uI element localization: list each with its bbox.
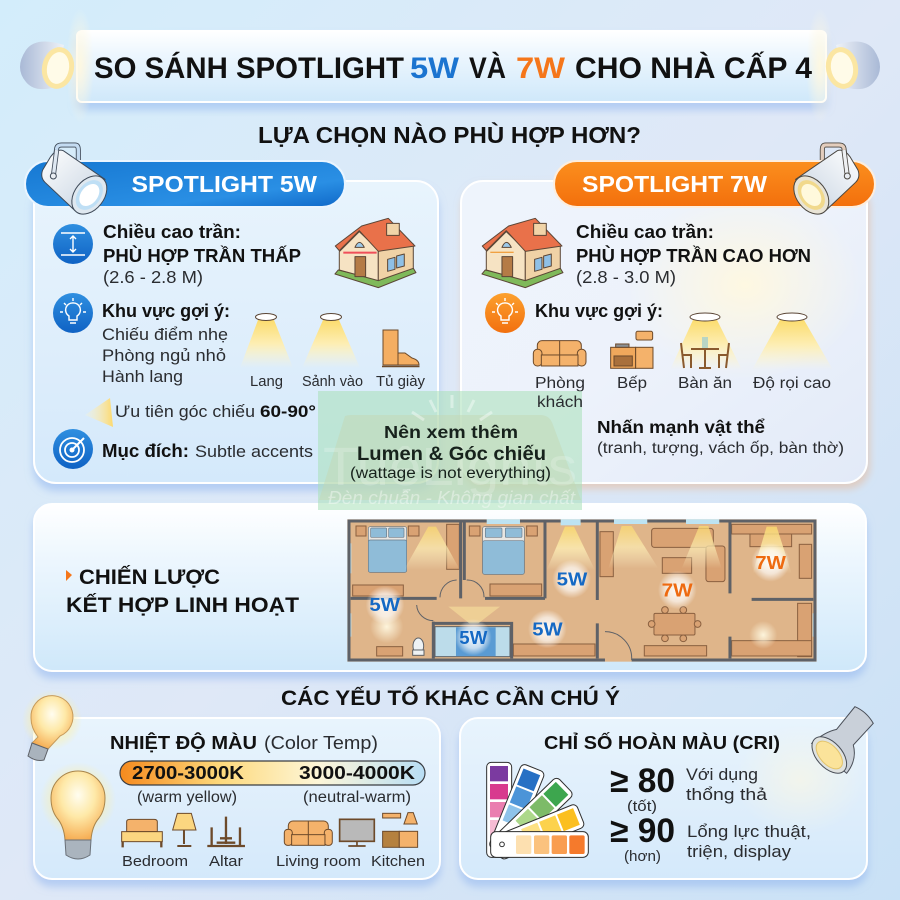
beam angle note: Ưu tiên góc chiếu bbox=[115, 403, 255, 421]
7W labels bbox=[662, 552, 787, 601]
CRI 80: Với dụng bbox=[686, 766, 758, 784]
7W labels: 7W bbox=[755, 552, 787, 573]
section heading: CÁC YẾU TỐ KHÁC CẦN CHÚ Ý bbox=[281, 686, 620, 710]
CRI 80: (tốt) bbox=[627, 798, 657, 815]
5W labels bbox=[369, 568, 588, 648]
CRI 80: thổng thả bbox=[686, 786, 768, 804]
light beam glow bbox=[627, 190, 863, 380]
floor plan bbox=[347, 519, 817, 662]
CRI 90: (hơn) bbox=[624, 848, 661, 865]
text: suggested areas 5W: Hành lang bbox=[102, 368, 183, 386]
pill heading 7W bbox=[554, 161, 875, 207]
CRI 90: ≥ 90 bbox=[610, 812, 675, 850]
right header spotlight bbox=[806, 8, 880, 124]
title bar bbox=[77, 31, 826, 102]
title accent 7W: 7W bbox=[516, 52, 565, 85]
title tail: CHO NHÀ CẤP 4 bbox=[575, 51, 813, 85]
furniture bbox=[353, 524, 812, 657]
light cones bbox=[366, 526, 792, 656]
title: SO SÁNH SPOTLIGHT bbox=[94, 51, 404, 85]
text: purpose: Subtle accents bbox=[195, 443, 313, 461]
text: ceiling height 7W: PHÙ HỢP TRẦN CAO HƠN bbox=[576, 245, 811, 266]
icon: dining table light bbox=[670, 313, 742, 392]
5W labels: 5W bbox=[459, 627, 488, 648]
note text: (wattage is not everything) bbox=[350, 465, 551, 482]
text: purpose: Mục đích: bbox=[102, 441, 189, 461]
icon: small bulb bbox=[22, 690, 82, 760]
icon: spotlight bbox=[805, 707, 873, 780]
watermark note bbox=[318, 391, 582, 510]
CRI 80 bbox=[610, 762, 768, 815]
doors bbox=[417, 580, 632, 660]
icon: color fan bbox=[487, 762, 588, 860]
CRI 90: Lổng lực thuật, bbox=[687, 823, 811, 841]
labels: neutral rooms: Kitchen bbox=[371, 853, 425, 870]
temperature scale bbox=[120, 761, 425, 806]
panel: spotlight 7W bbox=[461, 145, 875, 483]
text: suggested areas 5W bbox=[102, 301, 230, 386]
icon: living room sofa bbox=[533, 341, 586, 392]
panel: spotlight 5W bbox=[25, 145, 438, 483]
label: khách: khách bbox=[537, 394, 583, 411]
icon: high illuminance light bbox=[752, 313, 833, 392]
walls bbox=[349, 521, 815, 660]
labels: warm rooms: Bedroom bbox=[122, 853, 188, 870]
icon: kitchen bbox=[611, 331, 653, 392]
panel: combined strategy bbox=[34, 504, 866, 671]
text: purpose bbox=[102, 441, 313, 461]
icon: spotlight 5W bbox=[42, 145, 114, 221]
text: ceiling height 5W: Chiều cao trần: bbox=[103, 222, 241, 242]
windows bbox=[347, 519, 817, 637]
note text bbox=[350, 422, 551, 482]
icon: hallway light bbox=[240, 314, 293, 390]
icon: ceiling height bbox=[53, 224, 93, 264]
strategy heading: CHIẾN LƯỢC bbox=[79, 564, 220, 589]
note text: Nên xem thêm bbox=[384, 422, 518, 442]
labels: neutral rooms bbox=[276, 853, 425, 870]
icon: lobby light: Sảnh vào bbox=[302, 374, 363, 390]
icon: house bbox=[482, 218, 563, 288]
icon: target bbox=[53, 429, 93, 469]
text: suggested areas 5W: Khu vực gợi ý: bbox=[102, 301, 230, 321]
watermark note: Đèn chuẩn - Không gian chất bbox=[328, 488, 576, 508]
icon: lobby light bbox=[302, 314, 363, 390]
title word VÀ: VÀ bbox=[469, 51, 506, 85]
left header spotlight bbox=[20, 8, 94, 124]
text: object emphasis: (tranh, tượng, vách ốp, bàn thờ) bbox=[597, 440, 844, 457]
CRI 90: triện, display bbox=[687, 843, 792, 861]
beam angle note bbox=[85, 398, 316, 427]
panel: color temperature bbox=[22, 690, 440, 879]
text: ceiling height 5W: (2.6 - 2.8 M) bbox=[103, 267, 203, 287]
card title: CHỈ SỐ HOÀN MÀU (CRI) bbox=[544, 732, 780, 753]
text: ceiling height 7W: (2.8 - 3.0 M) bbox=[576, 267, 676, 287]
5W labels: 5W bbox=[369, 594, 401, 615]
icon: spotlight 7W bbox=[787, 145, 859, 221]
icon: large bulb bbox=[40, 762, 116, 859]
text: ceiling height 5W: PHÙ HỢP TRẦN THẤP bbox=[103, 245, 301, 266]
7W labels: 7W bbox=[662, 580, 693, 601]
5W labels: 5W bbox=[532, 618, 563, 639]
text: object emphasis bbox=[597, 417, 844, 457]
strategy heading: KẾT HỢP LINH HOẠT bbox=[66, 592, 299, 617]
CRI 80: ≥ 80 bbox=[610, 762, 675, 800]
icon: house bbox=[335, 218, 416, 288]
card title bbox=[110, 732, 378, 753]
icon: hallway light: Lang bbox=[250, 374, 283, 390]
title accent 5W: 5W bbox=[410, 52, 459, 85]
pill heading 7W: SPOTLIGHT 7W bbox=[582, 171, 767, 197]
text: ceiling height 5W bbox=[103, 222, 301, 287]
text: ceiling height 7W: Chiều cao trần: bbox=[576, 222, 714, 242]
icon: bulb orange bbox=[485, 293, 525, 333]
labels: warm rooms bbox=[122, 853, 243, 870]
note text: Lumen & Góc chiếu bbox=[357, 444, 546, 465]
icons: neutral rooms bbox=[284, 813, 418, 847]
temperature scale: 2700-3000K bbox=[132, 762, 245, 783]
labels: neutral rooms: Living room bbox=[276, 853, 361, 870]
panel: CRI bbox=[460, 707, 873, 879]
temperature scale: (warm yellow) bbox=[137, 789, 237, 806]
text: object emphasis: Nhấn mạnh vật thể bbox=[597, 417, 765, 437]
beam angle note: 60-90° bbox=[260, 403, 316, 421]
card title: (Color Temp) bbox=[264, 733, 378, 753]
temperature scale: 3000-4000K bbox=[299, 762, 416, 783]
text: suggested areas 7W: Khu vực gợi ý: bbox=[535, 301, 663, 321]
icons: warm rooms bbox=[122, 813, 245, 847]
icon: living room sofa: Phòng bbox=[535, 375, 585, 392]
pill heading 5W bbox=[25, 161, 345, 207]
5W labels: 5W bbox=[557, 568, 588, 589]
text: suggested areas 5W: Chiếu điểm nhẹ bbox=[102, 326, 228, 344]
beds bbox=[368, 527, 524, 574]
icon: shoe cabinet bbox=[376, 330, 426, 390]
strategy heading bbox=[66, 564, 299, 617]
subtitle: LỰA CHỌN NÀO PHÙ HỢP HƠN? bbox=[258, 121, 641, 148]
card title: NHIỆT ĐỘ MÀU bbox=[110, 732, 257, 753]
icon: dining table light: Bàn ăn bbox=[678, 375, 732, 392]
CRI 90 bbox=[610, 812, 811, 865]
icon: kitchen: Bếp bbox=[617, 375, 647, 392]
beam bbox=[735, 725, 865, 835]
text: ceiling height 7W bbox=[576, 222, 811, 287]
icon: high illuminance light: Độ rọi cao bbox=[753, 375, 831, 392]
marker bbox=[66, 570, 72, 581]
pill heading 5W: SPOTLIGHT 5W bbox=[132, 171, 317, 197]
labels: warm rooms: Altar bbox=[209, 853, 243, 870]
text: suggested areas 5W: Phòng ngủ nhỏ bbox=[102, 347, 226, 365]
bathroom bbox=[413, 627, 510, 657]
temperature scale: (neutral-warm) bbox=[303, 789, 411, 806]
icon: bulb bbox=[53, 293, 93, 333]
watermark note: TuệLights bbox=[323, 437, 577, 497]
icon: shoe cabinet: Tủ giày bbox=[376, 374, 426, 390]
